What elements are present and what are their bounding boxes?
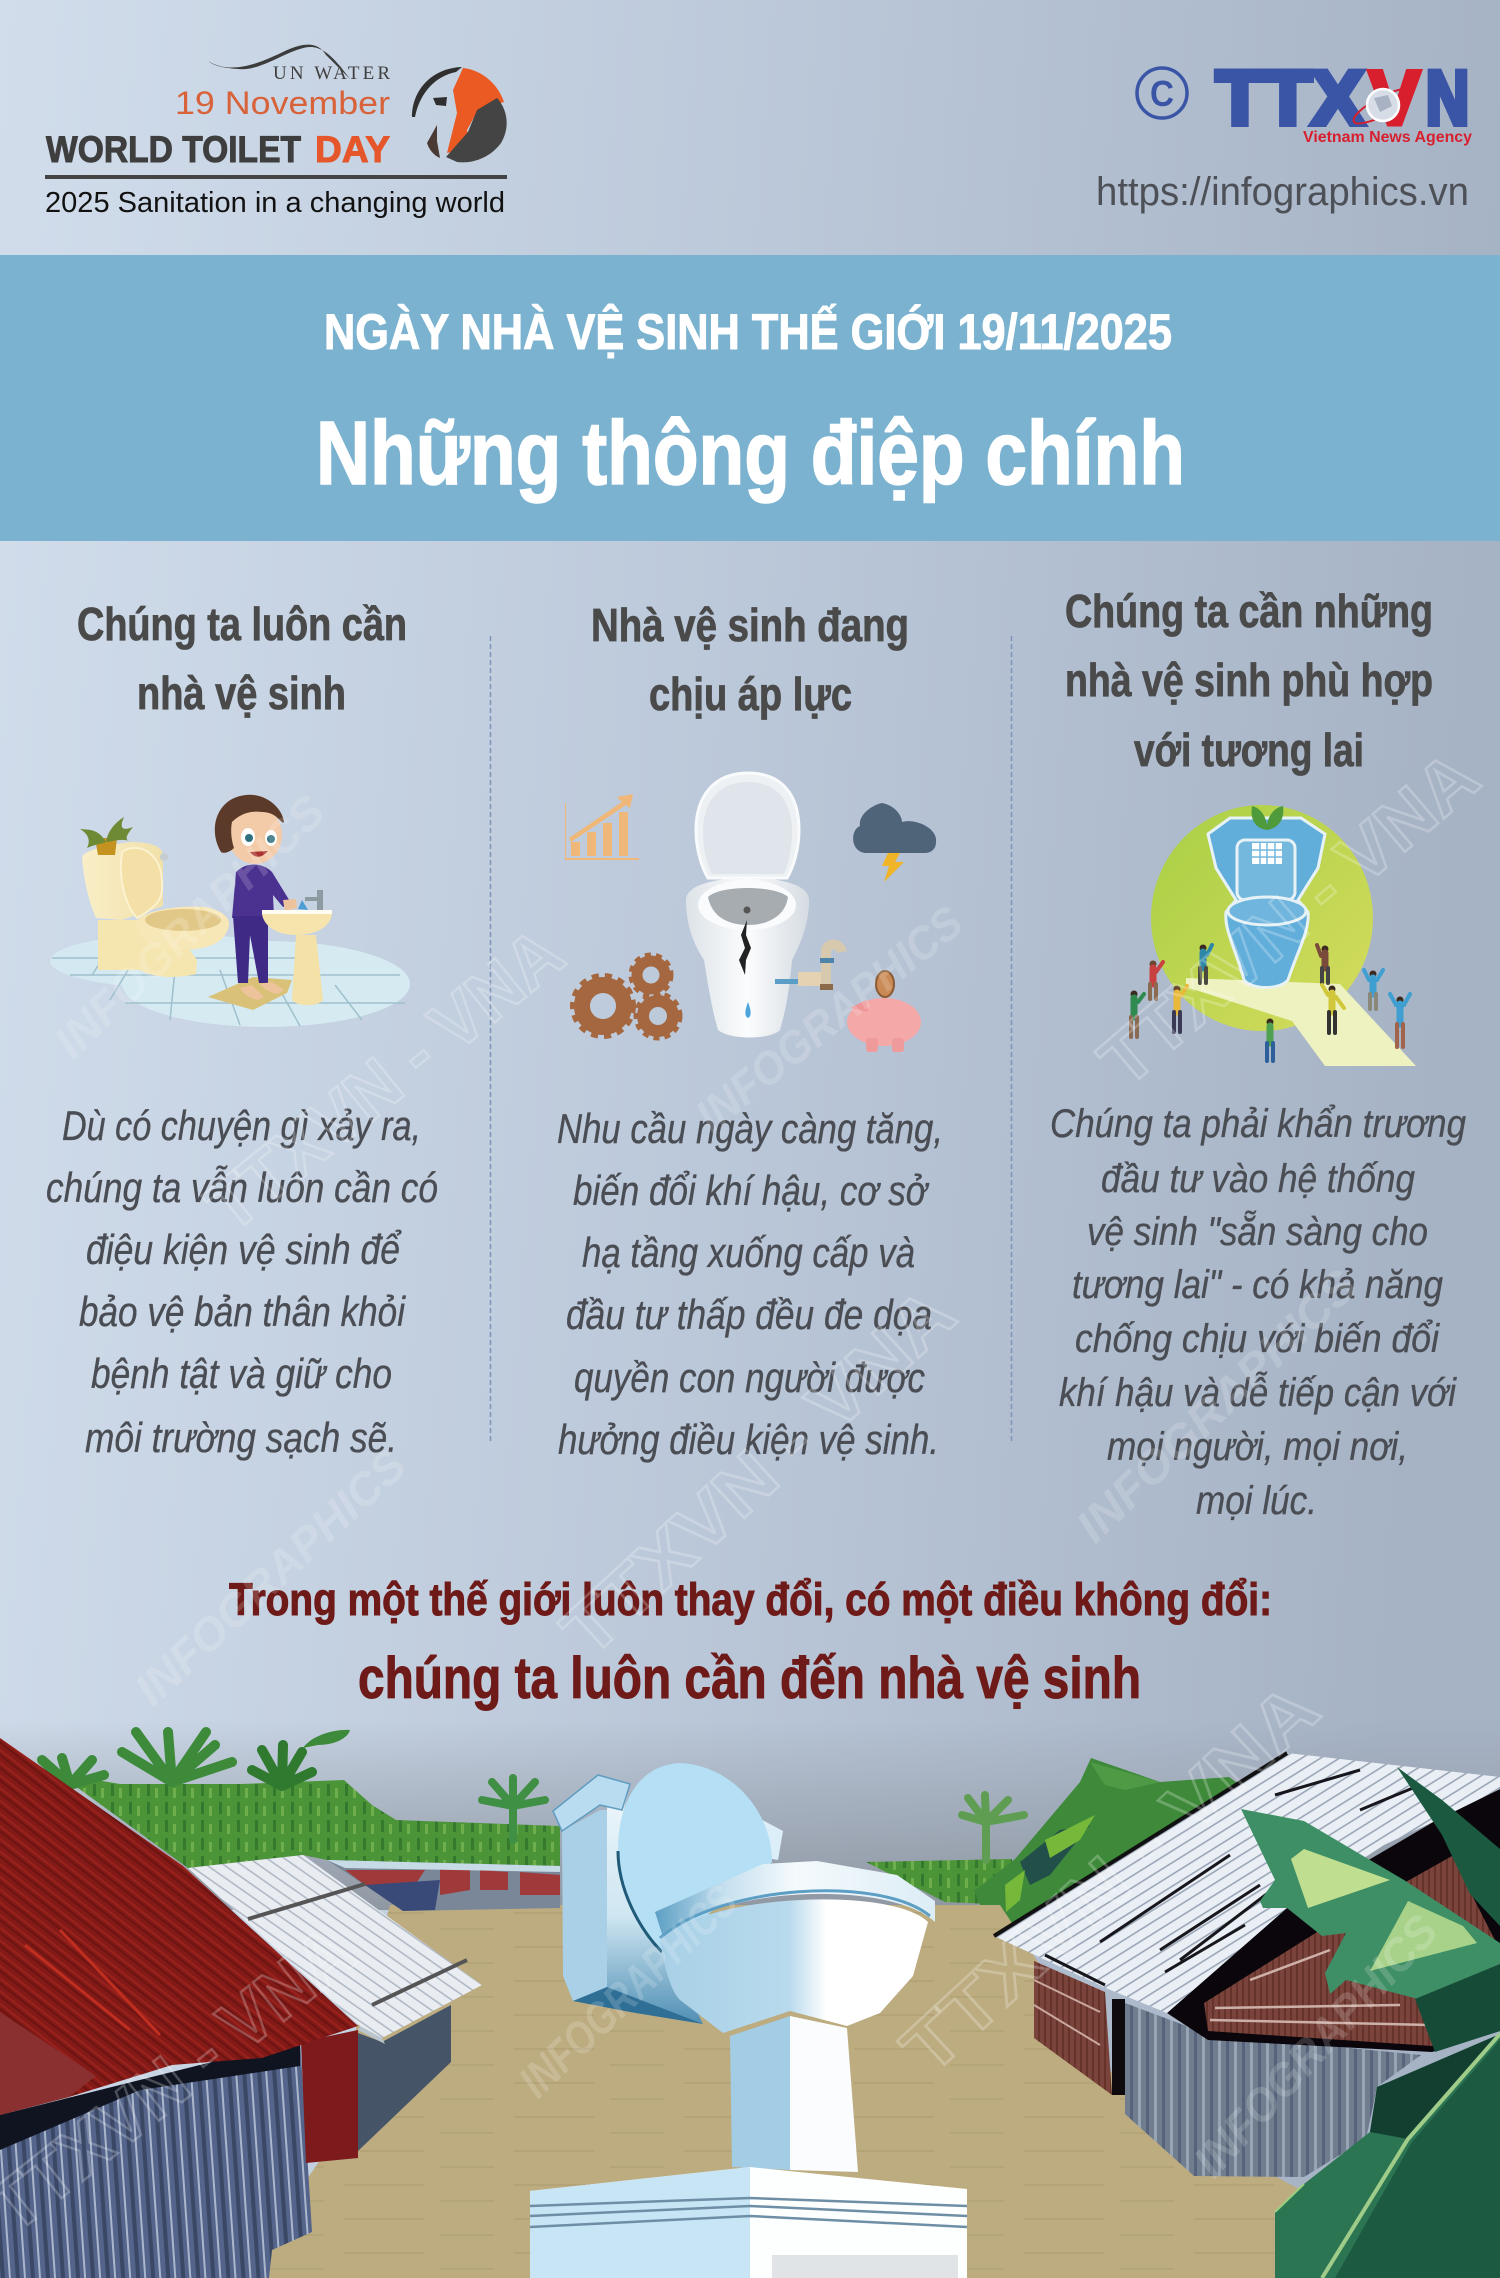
column 2 text: biến đổi khí hậu, cơ sở bbox=[573, 1167, 930, 1214]
right house bbox=[994, 1753, 1500, 2177]
globe bbox=[1350, 83, 1416, 129]
column 3 heading bbox=[1065, 585, 1433, 776]
subtitle: NGÀY NHÀ VỆ SINH THẾ GIỚI 19/11/2025 bbox=[324, 304, 1172, 360]
icon: leaking pipe bbox=[775, 944, 842, 990]
column 2 text: hưởng điều kiện vệ sinh. bbox=[558, 1416, 939, 1463]
column 1 text bbox=[46, 1102, 438, 1461]
vegetation left bbox=[34, 1730, 560, 1872]
column 2 text: đầu tư thấp đều đe dọa bbox=[566, 1291, 932, 1338]
watermarks: INFOGRAPHICS bbox=[1183, 1904, 1448, 2187]
logo: World Toilet Day bbox=[45, 45, 507, 219]
watermarks: INFOGRAPHICS bbox=[686, 895, 973, 1142]
column 2 text: quyền con người được bbox=[574, 1354, 925, 1401]
background house bbox=[327, 1860, 560, 1911]
website url: https://infographics.vn bbox=[1096, 170, 1469, 214]
column 2 text: hạ tầng xuống cấp và bbox=[582, 1229, 915, 1276]
theme line: 2025 Sanitation in a changing world bbox=[45, 187, 505, 219]
column 3 heading: với tương lai bbox=[1134, 724, 1364, 776]
column 1 heading bbox=[77, 598, 407, 719]
column 1 text: bệnh tật và giữ cho bbox=[91, 1350, 392, 1397]
column 2 heading bbox=[591, 599, 909, 720]
column 3 text: tương lai" - có khả năng bbox=[1072, 1263, 1443, 1307]
World Toilet wordmark: WORLD TOILET bbox=[46, 129, 301, 170]
banana leaves bbox=[1241, 1767, 1500, 2278]
V letter: V bbox=[1369, 56, 1420, 141]
column 2 heading: chịu áp lực bbox=[649, 668, 852, 720]
UN Water label: UN WATER bbox=[273, 63, 390, 84]
title band bbox=[0, 255, 1500, 541]
column 1 text: môi trường sạch sẽ. bbox=[85, 1414, 397, 1461]
globe icon bbox=[412, 67, 507, 162]
logo rule bbox=[45, 175, 507, 179]
column 3 text: mọi lúc. bbox=[1196, 1479, 1317, 1523]
icon: growth chart bbox=[565, 794, 639, 860]
panel: column 2 bbox=[557, 599, 943, 1463]
closing message: Trong một thế giới luôn thay đổi, có một điều không đổi: bbox=[229, 1574, 1272, 1625]
column 1 text: Dù có chuyện gì xảy ra, bbox=[62, 1102, 421, 1149]
giant toilet bbox=[530, 1763, 967, 2278]
panel: column 1 bbox=[46, 598, 438, 1461]
watermarks: TTXVN - VNA bbox=[887, 1668, 1334, 2090]
vegetation right bbox=[866, 1758, 1240, 1996]
watermarks: INFOGRAPHICS bbox=[44, 785, 335, 1068]
closing message: chúng ta luôn cần đến nhà vệ sinh bbox=[358, 1646, 1141, 1711]
closing message bbox=[229, 1574, 1272, 1711]
horizon haze bbox=[0, 1720, 1500, 1910]
column 3 text bbox=[1050, 1102, 1466, 1523]
icon: future-ready toilet bbox=[1151, 805, 1416, 1066]
left house bbox=[0, 1738, 482, 2278]
date: 19 November bbox=[175, 85, 390, 121]
icon: cracked toilet bbox=[686, 773, 809, 1038]
column 1 text: chúng ta vẫn luôn cần có bbox=[46, 1164, 438, 1211]
people around the toilet bbox=[1130, 944, 1410, 1061]
panel: column 3 bbox=[1050, 585, 1466, 1523]
column 3 text: mọi người, mọi nơi, bbox=[1107, 1425, 1408, 1469]
icon: boy washing hands beside toilet bbox=[50, 795, 410, 1027]
copyright mark: C bbox=[1150, 73, 1174, 114]
column 3 text: vệ sinh "sẵn sàng cho bbox=[1087, 1209, 1428, 1254]
watermarks: INFOGRAPHICS bbox=[1066, 1259, 1367, 1552]
N letter: N bbox=[1426, 56, 1469, 141]
copyright mark bbox=[1137, 68, 1187, 118]
Day wordmark: DAY bbox=[315, 129, 390, 170]
column 2 heading: Nhà vệ sinh đang bbox=[591, 599, 909, 651]
agency name: Vietnam News Agency bbox=[1303, 129, 1472, 146]
watermarks: TTXVN - VNA bbox=[547, 1273, 970, 1672]
TTX letters: TTX bbox=[1216, 56, 1364, 141]
watermarks bbox=[0, 736, 1494, 2248]
column 1 heading: Chúng ta luôn cần bbox=[77, 598, 407, 650]
column 1 text: điệu kiện vệ sinh để bbox=[86, 1226, 402, 1273]
column 1 text: bảo vệ bản thân khỏi bbox=[79, 1288, 406, 1335]
column 3 text: đầu tư vào hệ thống bbox=[1101, 1157, 1415, 1201]
main title: Những thông điệp chính bbox=[316, 404, 1185, 504]
icon: piggy bank bbox=[847, 971, 921, 1052]
column 2 text: Nhu cầu ngày càng tăng, bbox=[557, 1105, 943, 1152]
flood water bbox=[240, 1905, 1320, 2278]
logo: TTXVN bbox=[1137, 56, 1472, 146]
watermarks: TTXVN - VNA bbox=[1084, 736, 1494, 1102]
column 2 text bbox=[557, 1105, 943, 1463]
illustration: flooded village with toilet bbox=[0, 1730, 1500, 2278]
icon: gears bbox=[573, 955, 680, 1038]
column 3 text: chống chịu với biến đổi bbox=[1075, 1317, 1440, 1361]
UN Water swoosh bbox=[208, 45, 350, 79]
watermarks: INFOGRAPHICS bbox=[124, 1438, 416, 1715]
watermarks: INFOGRAPHICS bbox=[509, 1874, 747, 2107]
column 1 heading: nhà vệ sinh bbox=[137, 667, 346, 719]
icon: storm cloud bbox=[853, 803, 936, 882]
watermarks: TTXVN - VNA bbox=[192, 913, 579, 1247]
